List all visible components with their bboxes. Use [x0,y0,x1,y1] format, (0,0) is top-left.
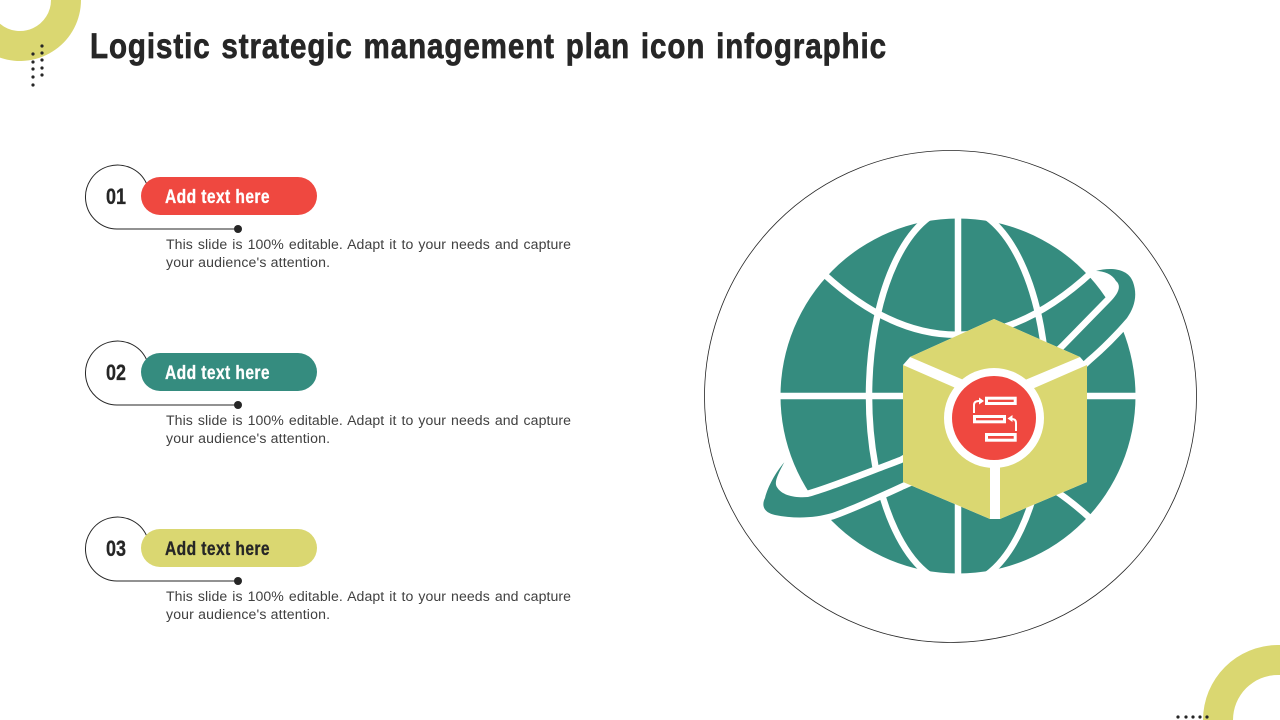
list item 03 [85,517,571,622]
description 03 [166,588,571,622]
description 02 [166,412,571,446]
box [903,319,1087,519]
description 02: your audience's attention. [166,430,330,446]
decoration: top-left dots [31,44,44,87]
description 03: This slide is 100% editable. Adapt it to your needs and capture [166,588,571,604]
decoration: bottom-right dots [1176,715,1209,719]
description 01 [166,236,571,270]
icon: process flow [974,398,1016,440]
number badge outline 01 [85,165,242,233]
globe [775,207,1140,585]
icon: globe with orbit and box [763,207,1140,585]
pill: yellow [141,529,317,567]
icon badge [944,368,1044,468]
number badge outline 03 [85,517,242,585]
decoration: top-left ring [0,0,81,61]
pill label 01: Add text here [165,187,270,208]
number 02: 02 [106,360,126,385]
orbit ring [763,269,1135,517]
description 01: your audience's attention. [166,254,330,270]
list item 01 [85,165,571,270]
list item 02 [85,341,571,446]
number badge outline 02 [85,341,242,409]
description 03: your audience's attention. [166,606,330,622]
description 02: This slide is 100% editable. Adapt it to your needs and capture [166,412,571,428]
outer circle outline [704,150,1196,642]
pill label 02: Add text here [165,363,270,384]
pill label 03: Add text here [165,539,270,560]
pill: teal [141,353,317,391]
decoration: bottom-right ring [1203,645,1280,720]
number 03: 03 [106,536,126,561]
pill: red [141,177,317,215]
description 01: This slide is 100% editable. Adapt it to your needs and capture [166,236,571,252]
number 01: 01 [106,184,126,209]
title: Logistic strategic management plan icon infographic [90,26,887,66]
